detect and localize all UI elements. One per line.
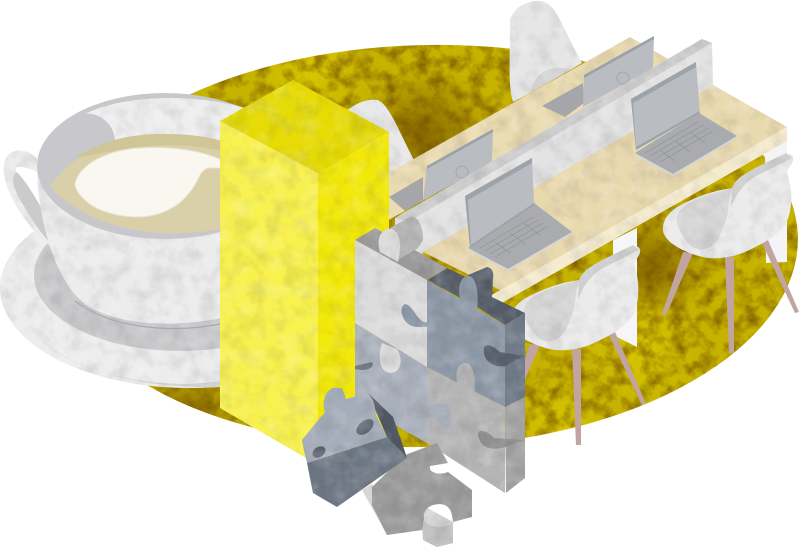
coffee cup: [4, 93, 300, 329]
top-right piece top side: [428, 267, 525, 325]
saucer: [0, 188, 380, 388]
top-left tab up: [379, 229, 400, 262]
right chair: [662, 153, 799, 353]
upper-right piece side: [505, 313, 525, 407]
lower-left piece face: [355, 323, 427, 443]
milk foam: [75, 148, 222, 217]
chair shell: [510, 245, 640, 350]
tab from top-left into lower-left: [380, 343, 401, 373]
tab into top-left piece: [401, 304, 428, 327]
back laptop right: [542, 36, 654, 117]
lower notch: [478, 431, 524, 449]
cup interior: [37, 93, 293, 239]
top-left piece top side: [355, 228, 447, 280]
saucer line under cup: [75, 301, 225, 329]
top-left tab side: [390, 217, 423, 260]
handle shadow: [13, 172, 50, 242]
front laptop right: [631, 62, 737, 176]
loose gray puzzle piece: [362, 443, 472, 547]
top-right tab up: [459, 276, 478, 309]
desk legs: [613, 140, 787, 347]
chair legs: [662, 240, 799, 353]
back chair: [510, 1, 582, 102]
top-right piece face: [427, 280, 505, 407]
chair legs: [509, 332, 646, 445]
block right face: [318, 132, 389, 465]
golden ellipse backdrop: [147, 44, 798, 448]
coffee darker edge: [75, 134, 245, 158]
chair shell: [663, 153, 793, 258]
front chair: [509, 245, 646, 445]
tab from lower-left into lower-right: [427, 404, 452, 428]
gray piece top: [372, 443, 472, 535]
puzzle stack: [355, 217, 525, 493]
block left face: [220, 121, 318, 465]
cup body: [37, 165, 300, 324]
blue piece front side: [307, 437, 407, 507]
lower-right piece face: [427, 367, 505, 493]
front laptop left: [465, 158, 572, 271]
top-left piece face: [355, 240, 427, 367]
upper notch: [484, 345, 524, 366]
left chair behind block: [345, 100, 414, 175]
back laptop left: [389, 129, 493, 211]
tab from lower-right into top-right: [456, 363, 475, 394]
blue piece top: [302, 388, 387, 463]
cup handle: [4, 150, 50, 245]
blue piece dark back side: [368, 393, 407, 458]
interior light wall: [85, 98, 245, 145]
lower-right piece side: [505, 397, 525, 493]
loose blue puzzle piece: [302, 388, 407, 507]
front desk: [423, 85, 787, 304]
central divider: [395, 39, 713, 262]
block top face: [220, 80, 389, 173]
blue piece upper notch: [353, 416, 377, 438]
yellow block: [220, 80, 389, 465]
gray piece side: [362, 484, 453, 547]
coffee: [50, 134, 245, 234]
blue piece left notch: [310, 444, 328, 460]
back desk top: [380, 37, 670, 225]
gray piece tab: [423, 520, 453, 547]
left notch: [355, 362, 373, 370]
